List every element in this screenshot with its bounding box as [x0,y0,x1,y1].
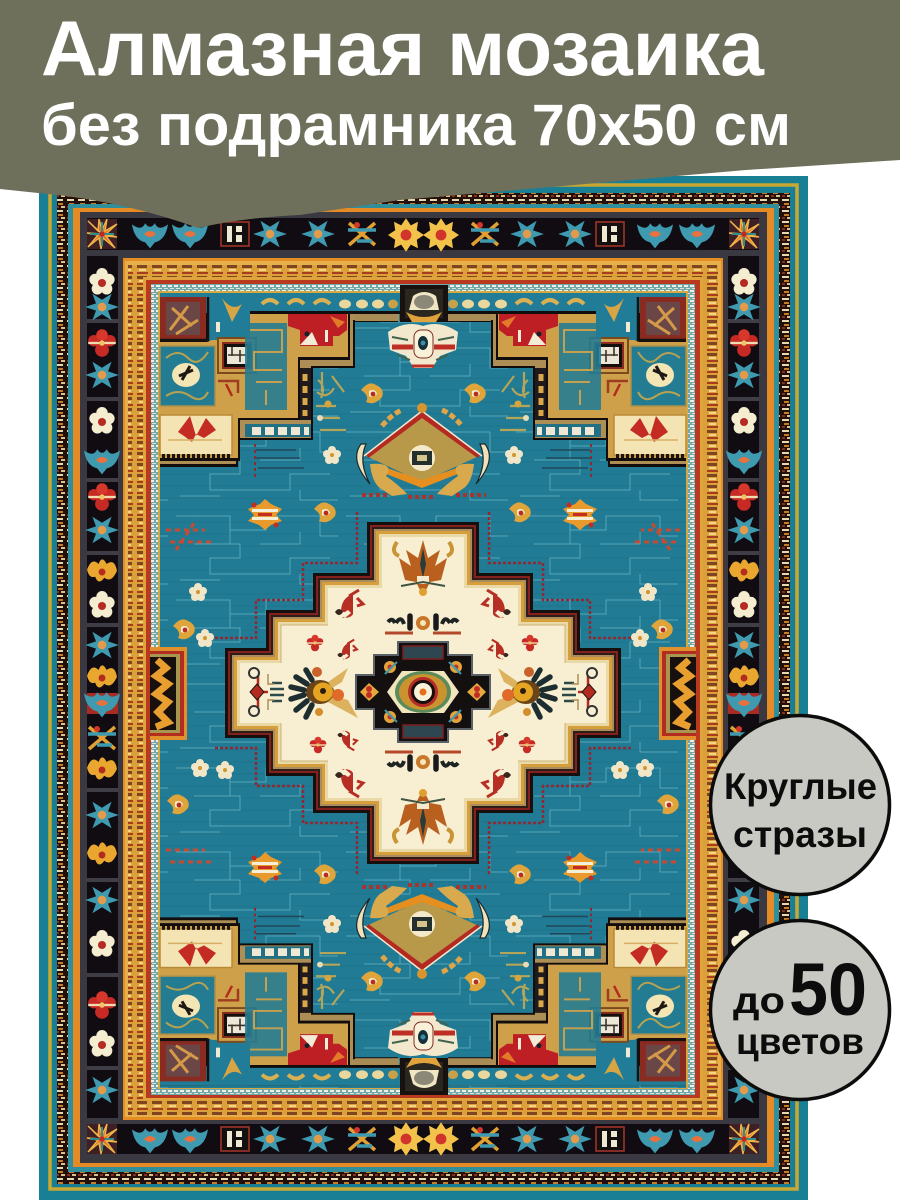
badge: up to 50 colours: до [733,980,785,1021]
badge: round rhinestones [710,716,890,894]
medallion side motifs [249,667,597,718]
header banner [0,0,900,228]
badge: round rhinestones: Круглые [724,766,877,807]
side bracket: right [659,647,696,740]
gold frame [123,258,723,1120]
right border column [726,256,762,1118]
badge: up to 50 colours [710,920,890,1100]
medallion flower rows [385,616,461,769]
corner panel: top left [160,293,400,478]
badge: up to 50 colours: 50 [789,948,867,1031]
medallion quarter motifs [307,590,538,797]
left border column [84,256,120,1118]
dark grey border ground [80,212,767,1163]
side bracket: left [150,647,187,740]
bottom medallion crest [388,1012,458,1095]
corner panel: bottom right [446,907,686,1085]
carpet image [39,176,808,1200]
gold edge line [50,185,797,1189]
medallion arm motifs [394,540,452,845]
central field with maze lines [160,293,686,1088]
carpet outer teal edge [39,176,808,1200]
corner panel: top right [446,293,686,478]
top black border band [87,218,759,252]
badge: up to 50 colours: цветов [736,1021,864,1062]
medallion black cross centre [355,641,491,743]
title: Алмазная мозаика [41,4,765,92]
bottom black border band [87,1122,759,1156]
corner panel: bottom left [160,907,400,1085]
orange border line [73,208,774,1167]
central stepped medallion [215,512,631,874]
lower arch motif [357,885,489,979]
badge: round rhinestones: стразы [733,814,867,855]
subtitle: без подрамника 70х50 см [41,93,791,158]
outer bead band [57,193,790,1184]
top medallion crest [388,285,458,368]
teal inner edge [68,204,779,1172]
upper arch motif [357,403,489,497]
field ornaments [166,383,680,991]
